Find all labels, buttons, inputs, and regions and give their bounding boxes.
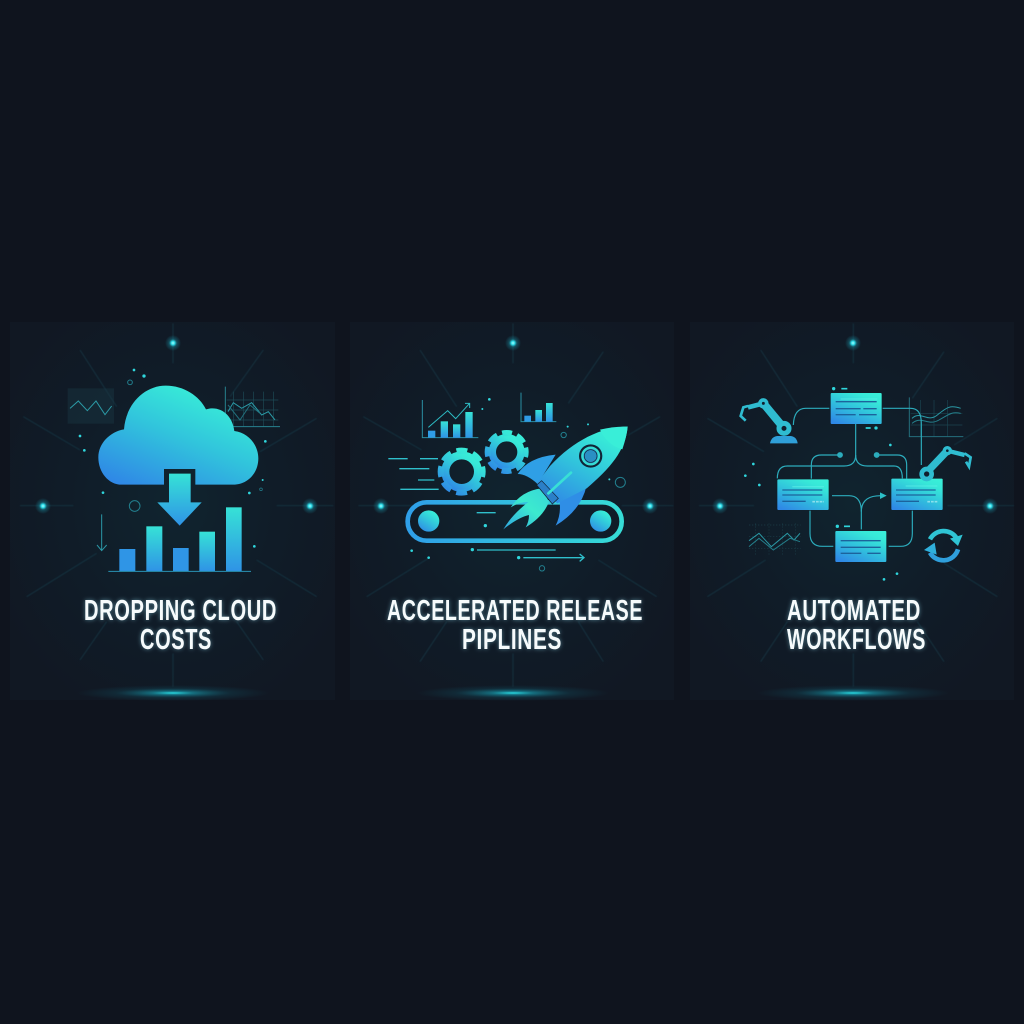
panel 3 glowing nodes (712, 335, 998, 514)
workflow card bottom (835, 525, 886, 562)
title: accelerated release piplines: PIPLINES (462, 624, 562, 656)
panel 2 background (350, 322, 674, 700)
title: automated workflows: AUTOMATED (787, 595, 921, 627)
workflow card right (891, 479, 943, 510)
flow connectors (777, 408, 921, 546)
title: dropping cloud costs: COSTS (140, 624, 212, 656)
panel 1 faint grid chart right (225, 387, 280, 427)
icon: down arrow (157, 474, 202, 526)
icon: rocket (503, 427, 628, 529)
icon: robot arm right (922, 448, 971, 479)
panel: dropping cloud costs (10, 322, 335, 701)
panel 1 light rays (20, 323, 333, 687)
panel 1 faint line chart left (68, 388, 114, 424)
panel 3 background (690, 322, 1014, 700)
icon: thin down arrow (97, 514, 107, 551)
motion lines with arrow (477, 550, 584, 561)
panel 1 glowing nodes (35, 335, 318, 514)
panel 1 floor glow (77, 685, 269, 701)
panel 2 floor glow (417, 685, 609, 701)
decorative particles panel 1 (79, 369, 267, 548)
title: dropping cloud costs: DROPPING CLOUD (84, 595, 277, 627)
icon: conveyor belt (408, 502, 622, 541)
panel 2 glowing nodes (373, 335, 658, 514)
panel: automated workflows (690, 322, 1014, 701)
panel 3 floor glow (757, 685, 949, 701)
panel 1 background (10, 322, 335, 700)
bar chart with trend arrow (422, 400, 478, 438)
faint wave chart bottom left (749, 523, 801, 555)
icon: refresh cycle (924, 531, 963, 560)
workflow card top (831, 387, 882, 430)
panel: accelerated release pipelines (350, 322, 674, 701)
icon: cloud (98, 386, 258, 485)
decorative particles panel 2 (410, 398, 625, 571)
faint grid chart top right (909, 397, 963, 437)
icon: small gear (488, 433, 526, 471)
title: automated workflows: WORKFLOWS (787, 624, 926, 656)
title: dropping cloud costs (84, 595, 277, 656)
decorative particles panel 3 (744, 444, 898, 581)
small bar chart (521, 393, 556, 422)
title: automated workflows (787, 595, 926, 656)
title: accelerated release piplines (387, 595, 643, 656)
title: accelerated release piplines: ACCELERATED RELEASE (387, 595, 643, 627)
panel 2 light rays (358, 323, 673, 687)
icon: large gear (441, 451, 483, 493)
bar chart (108, 507, 251, 571)
panel 3 light rays (699, 323, 1014, 687)
speed lines (388, 459, 439, 489)
icon: robot arm left (741, 400, 798, 443)
workflow card left (777, 479, 829, 510)
